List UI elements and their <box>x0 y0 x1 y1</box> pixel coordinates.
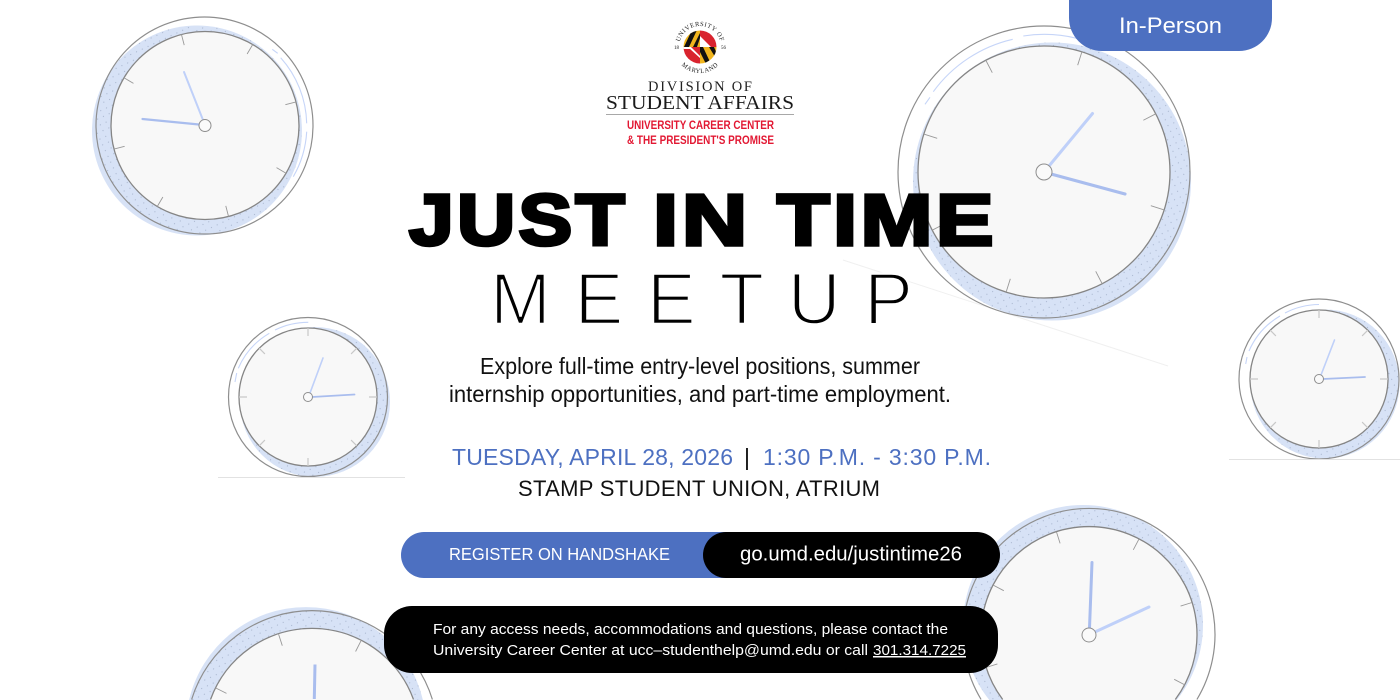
logo: University of Maryland Division of Student Affairs: UNIVERSITY CAREER CENTER <box>627 118 774 132</box>
clock: mid right <box>1229 299 1400 460</box>
description text <box>449 353 951 407</box>
title: Just In Time: TIME <box>777 181 997 261</box>
title: Just In Time: JUST <box>409 181 628 261</box>
clock: top left <box>90 11 320 240</box>
clock: top right large <box>897 25 1191 320</box>
clock: bottom left <box>189 607 432 700</box>
event date and time: | <box>744 444 750 470</box>
contact box: 301.314.7225 <box>873 642 966 659</box>
event date and time: TUESDAY, APRIL 28, 2026 <box>452 444 733 470</box>
clock: mid left <box>218 318 405 478</box>
registration bar: go.umd.edu/justintime26 <box>740 542 962 566</box>
logo: University of Maryland Division of Student Affairs <box>606 22 794 147</box>
contact box <box>384 606 998 673</box>
clock: bottom right <box>963 505 1215 700</box>
icon: university seal: 56 <box>721 46 726 51</box>
contact box: For any access needs, accommodations and questions, please contact the <box>433 621 948 638</box>
badge: In-Person <box>1069 0 1272 51</box>
logo: University of Maryland Division of Student Affairs: DIVISION OF <box>648 79 752 95</box>
subtitle: Meetup: MEETUP <box>490 259 913 340</box>
description text: internship opportunities, and part-time employment. <box>449 381 951 407</box>
logo: University of Maryland Division of Student Affairs: & THE PRESIDENT'S PROMISE <box>627 133 774 147</box>
event date and time: 1:30 P.M. - 3:30 P.M. <box>763 444 991 470</box>
description text: Explore full-time entry-level positions, summer <box>480 353 920 379</box>
event date and time <box>452 444 991 470</box>
icon: university seal <box>674 22 726 74</box>
icon: university seal: 18 <box>674 46 680 51</box>
title: Just In Time: IN <box>653 181 751 261</box>
faint ground line under large clock <box>843 260 1168 366</box>
registration bar <box>401 532 1000 578</box>
contact box: University Career Center at ucc–studenthelp@umd.edu or call <box>433 642 868 659</box>
event location: STAMP STUDENT UNION, ATRIUM <box>518 476 880 501</box>
icon: university seal: MARYLAND <box>682 62 718 74</box>
icon: university seal: UNIVERSITY OF <box>676 22 724 41</box>
title: Just In Time <box>409 181 997 261</box>
registration bar: REGISTER ON HANDSHAKE <box>449 544 670 564</box>
badge: In-Person: In-Person <box>1119 13 1222 38</box>
logo: University of Maryland Division of Student Affairs: STUDENT AFFAIRS <box>606 92 794 114</box>
